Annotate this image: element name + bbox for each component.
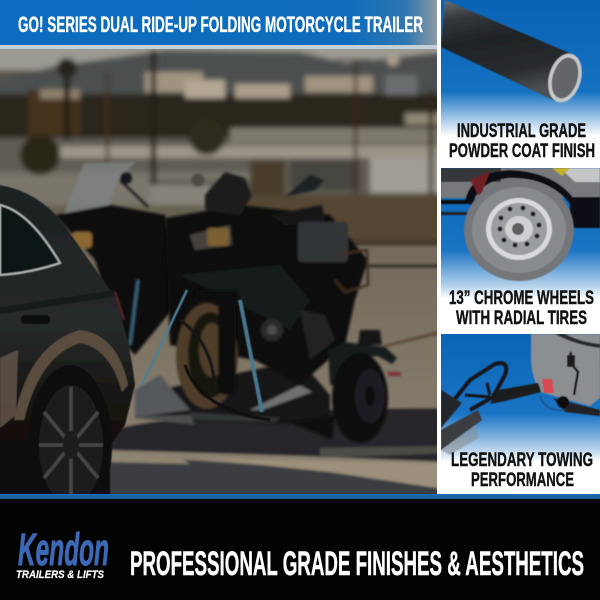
trailer wheel and fender [292,328,402,444]
caption: chrome wheels [450,290,594,324]
trailer deck and ramp [135,360,330,425]
icon: steel tube [441,0,587,106]
panel: trailer photo [0,49,437,494]
footer band [0,494,600,600]
icon: chrome wheel and tire [464,179,574,281]
caption: towing [452,452,592,486]
icon: tow vehicle [531,334,600,416]
caption: powder coat [450,123,594,158]
logo: Kendon Trailers & Lifts: Kendon [18,524,109,575]
photo background scenery [0,49,437,248]
tie-down straps [142,290,270,420]
panel: towing performance [441,334,600,494]
icon: wheel chock and tongue [441,363,565,455]
logo: Kendon Trailers & Lifts: TRAILERS & LIFTS [16,569,105,581]
trailer frame [441,168,600,228]
title banner [0,0,437,49]
motorcycle front wheel [176,290,240,409]
road surface [81,245,437,494]
car [0,185,135,525]
panel: chrome wheels [441,168,600,332]
panel: powder coat finish [441,0,600,166]
motorcycle, rear [55,162,180,355]
logo: Kendon Trailers & Lifts [16,524,109,581]
motorcycle, front [165,172,368,385]
